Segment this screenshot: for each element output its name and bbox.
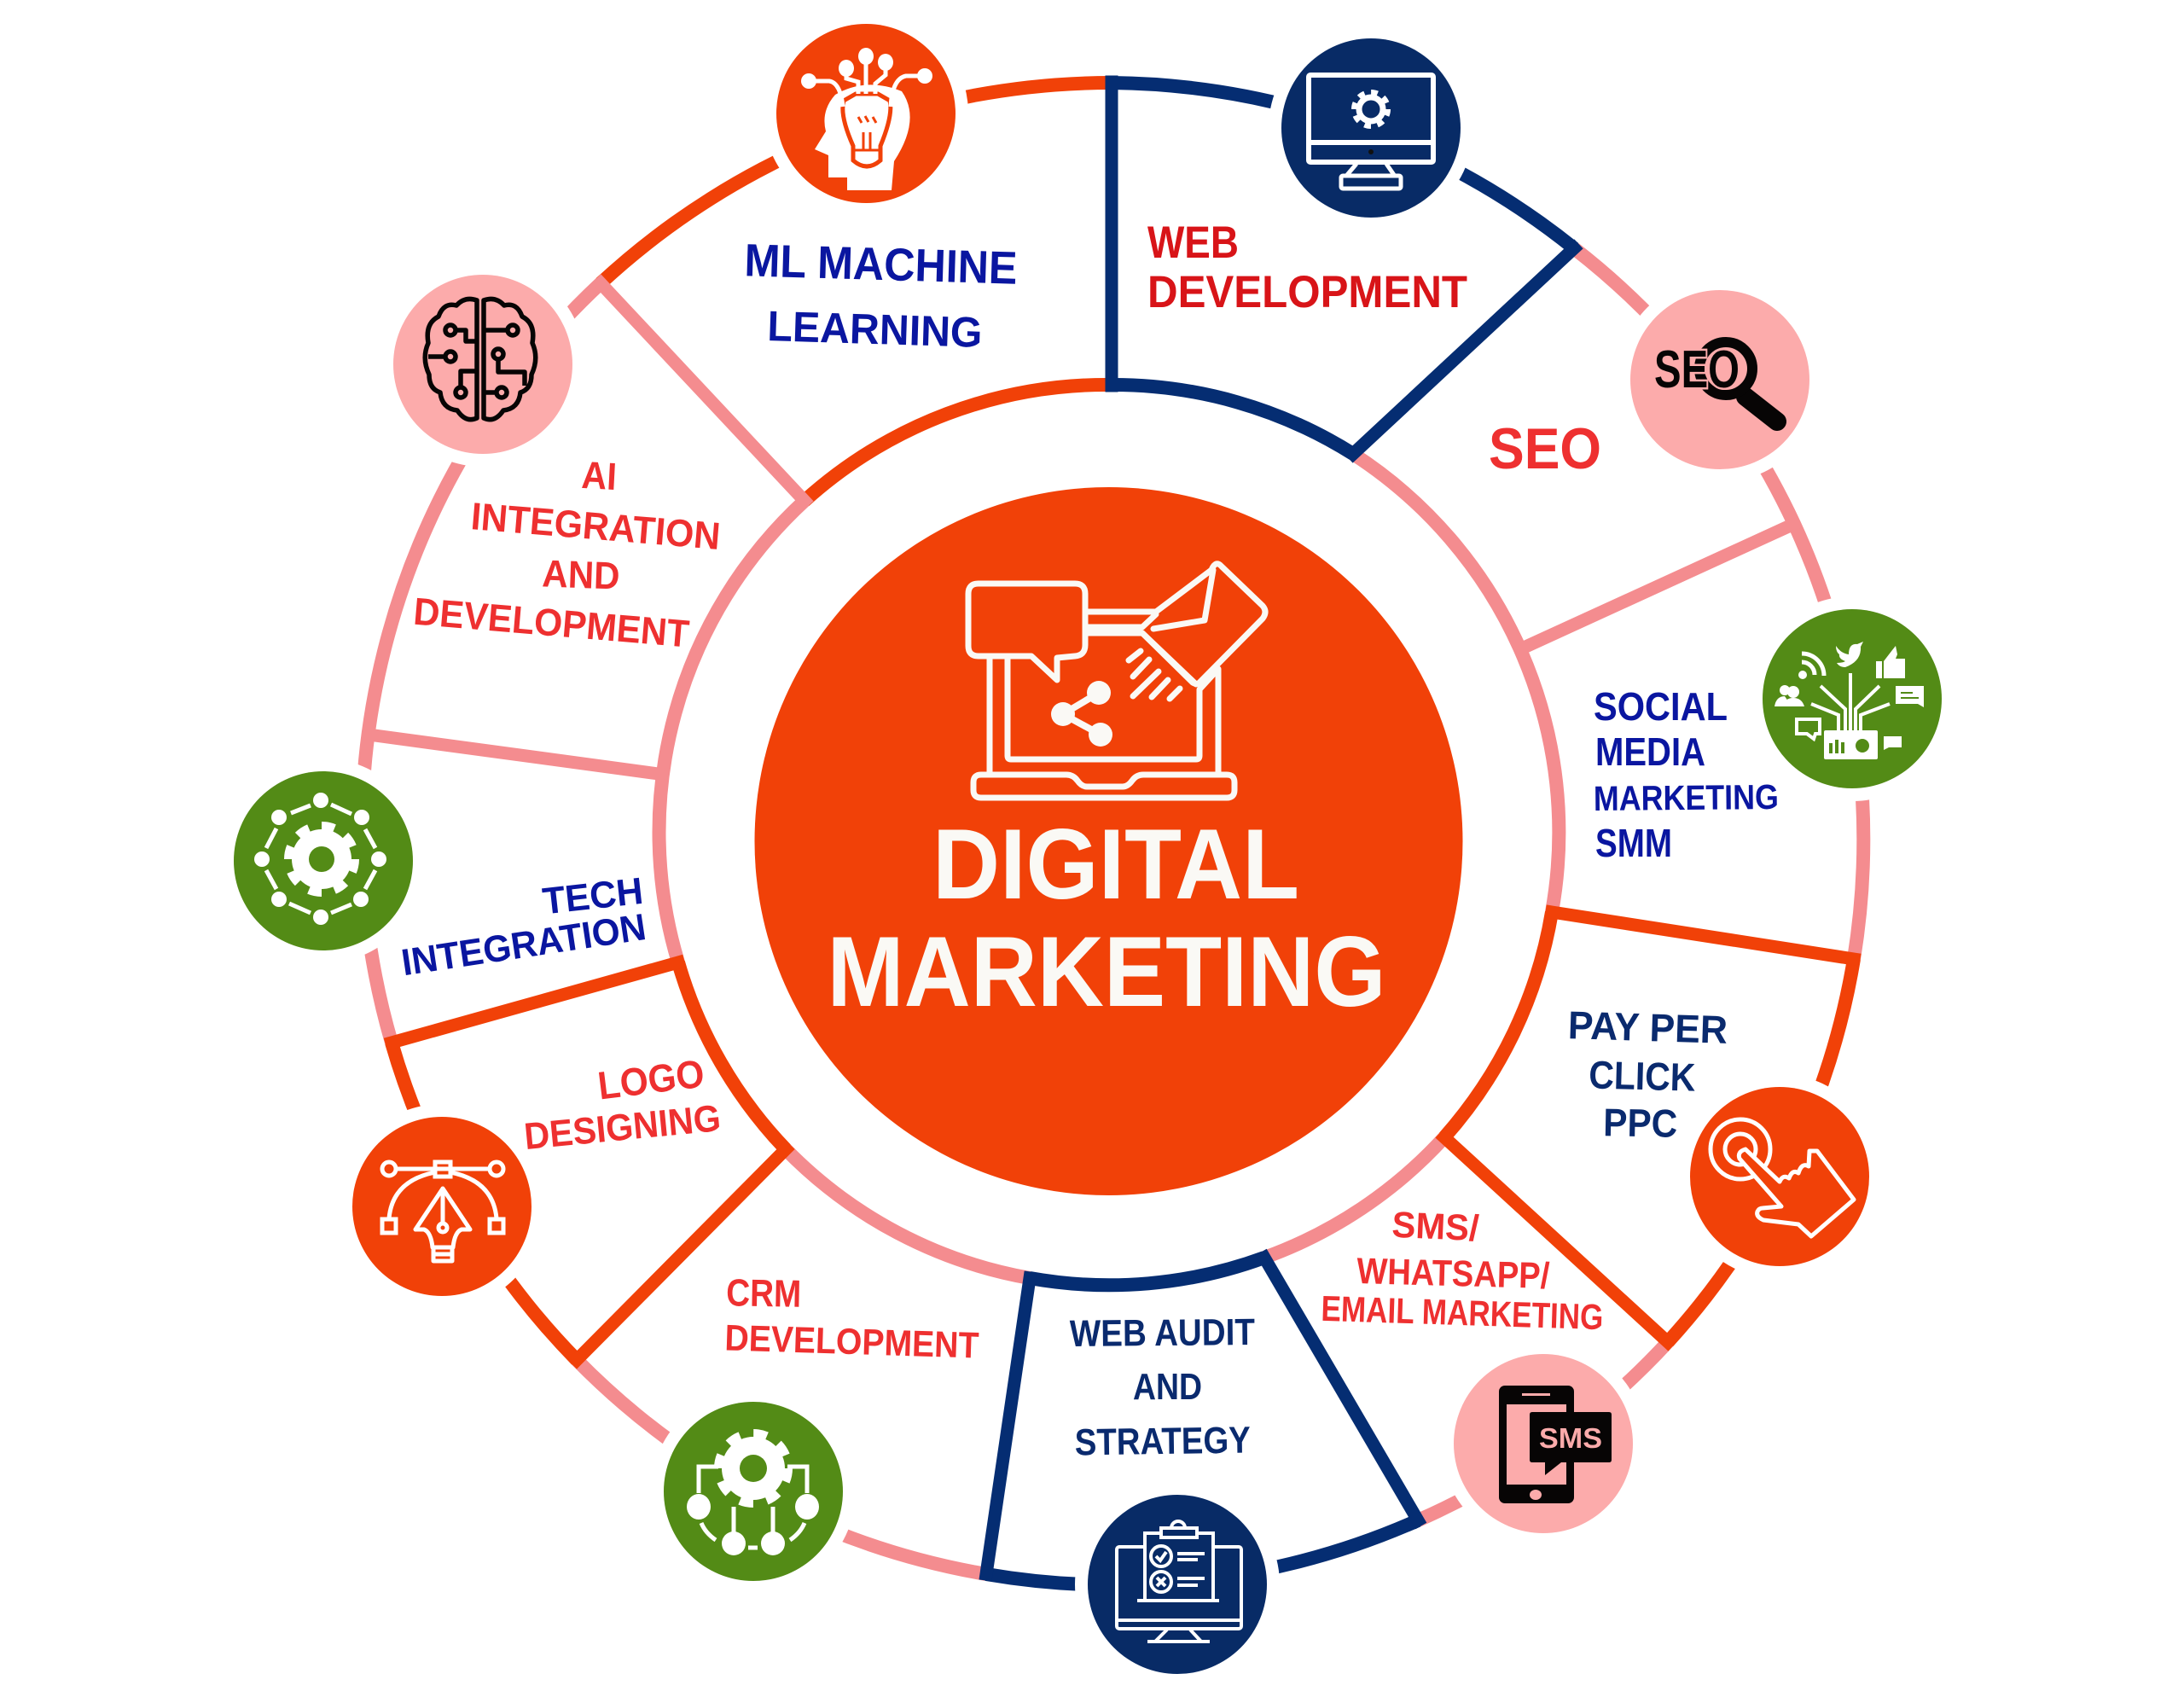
icon: phone with SMS bubble bbox=[1454, 1354, 1633, 1533]
label: pay per click: CLICK bbox=[1589, 1052, 1696, 1100]
title bbox=[828, 808, 1385, 1027]
label: social media marketing bbox=[1594, 684, 1779, 865]
icon: CRM gear network bbox=[664, 1402, 843, 1581]
label: ML machine learning bbox=[744, 235, 1018, 357]
label: CRM development: CRM bbox=[726, 1270, 802, 1316]
title: DIGITAL bbox=[932, 808, 1299, 920]
label: pay per click: PPC bbox=[1603, 1100, 1678, 1146]
icon: circuit brain bbox=[393, 275, 572, 454]
icon: tech gear ring bbox=[234, 771, 413, 950]
label: SMS whatsapp email marketing: WHATSAPP/ bbox=[1356, 1251, 1550, 1297]
label: web audit and strategy: WEB AUDIT bbox=[1070, 1311, 1255, 1355]
label: social media marketing: MARKETING bbox=[1594, 777, 1779, 818]
label: AI integration and development bbox=[412, 453, 722, 656]
label: AI integration and development: AND bbox=[542, 551, 620, 598]
label: logo designing: DESIGNING bbox=[522, 1097, 723, 1158]
label: social media marketing: SOCIAL bbox=[1594, 684, 1728, 729]
label: CRM development: DEVELOPMENT bbox=[724, 1317, 979, 1367]
label: SMS whatsapp email marketing: SMS/ bbox=[1391, 1205, 1480, 1249]
label: web development bbox=[1147, 218, 1467, 317]
label: web development: WEB bbox=[1147, 218, 1239, 268]
label: tech integration: INTEGRATION bbox=[398, 906, 648, 984]
label: web audit and strategy bbox=[1070, 1311, 1255, 1463]
icon: pointing hand click bbox=[1690, 1087, 1869, 1266]
icon halos bbox=[221, 11, 1955, 1687]
label: social media marketing: SMM bbox=[1595, 821, 1672, 865]
label: CRM development bbox=[724, 1270, 979, 1367]
label: web development: DEVELOPMENT bbox=[1147, 267, 1467, 317]
icon: SEO magnifier bbox=[1630, 290, 1809, 469]
radial dividers bbox=[369, 82, 1854, 1574]
label: AI integration and development: INTEGRATION bbox=[469, 494, 722, 558]
label: SEO: SEO bbox=[1489, 416, 1601, 481]
icon: audit clipboard on monitor bbox=[1088, 1495, 1267, 1674]
title: MARKETING bbox=[828, 915, 1385, 1027]
icon: SEO magnifier: SEO bbox=[1654, 340, 1740, 399]
central circle bbox=[754, 487, 1462, 1195]
icon: phone with SMS bubble: SMS bbox=[1539, 1422, 1602, 1454]
icon: social media network bbox=[1763, 609, 1942, 788]
label: pay per click bbox=[1567, 1003, 1728, 1146]
label: AI integration and development: AI bbox=[581, 453, 618, 498]
label: SMS whatsapp email marketing bbox=[1321, 1205, 1604, 1337]
label: web audit and strategy: AND bbox=[1133, 1366, 1202, 1408]
outer ring bbox=[362, 83, 1863, 1585]
label: SMS whatsapp email marketing: EMAIL MARKETING bbox=[1321, 1288, 1604, 1337]
inner ring bbox=[659, 385, 1559, 1285]
label: pay per click: PAY PER bbox=[1567, 1003, 1728, 1052]
label: AI integration and development: DEVELOPMENT bbox=[412, 590, 691, 656]
label: logo designing bbox=[522, 1051, 723, 1158]
label: social media marketing: MEDIA bbox=[1595, 729, 1705, 774]
icon: ML head with bulb bbox=[776, 24, 956, 203]
icon: laptop with chat bubble, envelope and share bbox=[968, 564, 1265, 798]
label: tech integration bbox=[398, 870, 648, 984]
label: ML machine learning: LEARNING bbox=[767, 302, 983, 357]
label: tech integration: TECH bbox=[541, 870, 645, 922]
label: ML machine learning: ML MACHINE bbox=[744, 235, 1018, 294]
label: web audit and strategy: STRATEGY bbox=[1074, 1420, 1251, 1463]
icon: pen tool vector bbox=[352, 1117, 531, 1296]
label: logo designing: LOGO bbox=[595, 1051, 706, 1108]
icon: monitor with gear bbox=[1281, 38, 1461, 218]
